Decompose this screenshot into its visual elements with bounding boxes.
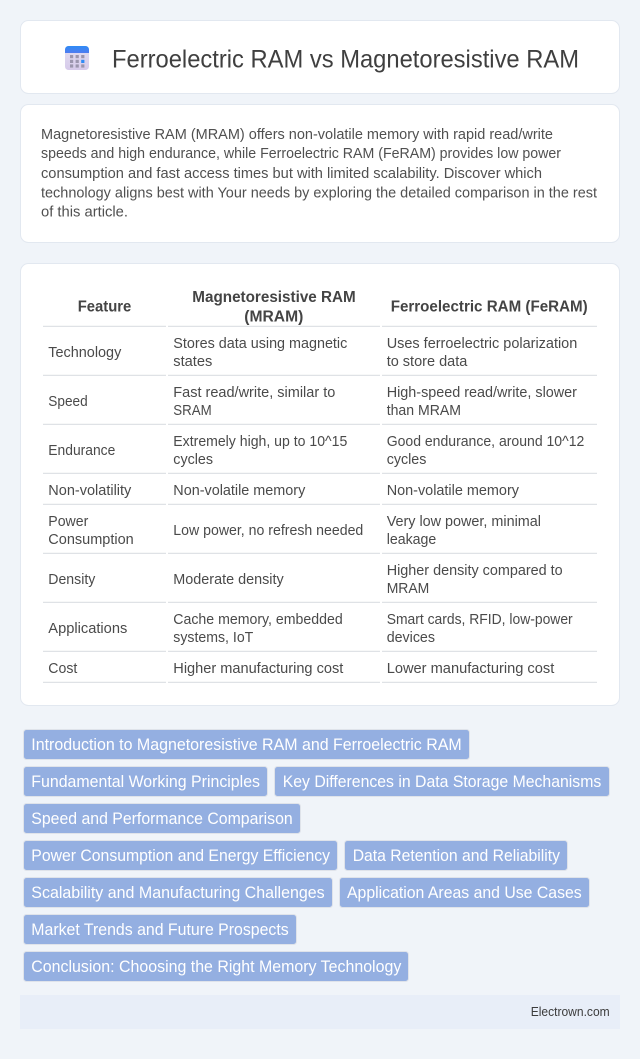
footer xyxy=(20,995,620,1029)
table header row: Feature xyxy=(78,299,131,316)
tag: application areas xyxy=(340,878,590,908)
row: endurance xyxy=(48,434,584,468)
tag: conclusion xyxy=(24,952,408,982)
row: cost: Cost xyxy=(48,661,77,677)
row: endurance: cycles xyxy=(173,452,213,468)
panel: comparison table xyxy=(20,264,620,706)
row: power consumption: Low power, no refresh needed xyxy=(173,523,363,539)
table header row: Magnetoresistive RAM xyxy=(192,289,356,306)
panel: topic tags xyxy=(24,730,610,982)
row: power consumption: Power xyxy=(48,514,88,530)
row: applications: systems, IoT xyxy=(173,630,253,646)
row: endurance: Good endurance, around 10^12 xyxy=(387,434,584,450)
tag: conclusion: Conclusion: Choosing the Right Memory Technology xyxy=(31,958,402,976)
row: technology: Technology xyxy=(48,345,122,361)
row: speed: than MRAM xyxy=(387,403,461,419)
row: power consumption: Very low power, minimal xyxy=(387,514,541,530)
panel: introduction paragraph: of this article. xyxy=(41,205,128,221)
tag: scalability: Scalability and Manufacturing Challenges xyxy=(31,884,325,902)
row: density: Higher density compared to xyxy=(387,563,563,579)
row: applications: Applications xyxy=(48,621,127,637)
tag: market trends xyxy=(24,914,296,944)
panel: title header xyxy=(20,20,620,94)
panel: introduction paragraph: consumption and fast access times but with limited scalability. Discover which xyxy=(41,166,542,182)
tag: power consumption: Power Consumption and Energy Efficiency xyxy=(31,847,331,865)
tag: speed and performance: Speed and Performance Comparison xyxy=(31,810,293,828)
row: speed: Speed xyxy=(48,394,88,410)
row: non-volatility: Non-volatility xyxy=(48,483,132,499)
row: technology: Stores data using magnetic xyxy=(173,336,347,352)
tag: application areas: Application Areas and Use Cases xyxy=(347,884,582,902)
panel: introduction paragraph: speeds and high endurance, while Ferroelectric RAM (FeRAM) provides low power xyxy=(41,146,561,162)
row: power consumption: leakage xyxy=(387,532,436,548)
row: cost: Higher manufacturing cost xyxy=(173,661,343,677)
tag: introduction: Introduction to Magnetoresistive RAM and Ferroelectric RAM xyxy=(31,736,462,754)
tag: introduction xyxy=(24,730,470,760)
row: density: MRAM xyxy=(387,581,429,597)
row: cost xyxy=(48,661,554,677)
icon: memory chip calendar xyxy=(65,46,89,70)
table header row: Ferroelectric RAM (FeRAM) xyxy=(391,299,588,316)
row: applications xyxy=(48,612,573,646)
tag: working principles xyxy=(24,766,268,796)
row: applications: devices xyxy=(387,630,435,646)
tag: scalability xyxy=(24,878,332,908)
title: Ferroelectric RAM vs Magnetoresistive RAM xyxy=(112,45,579,73)
row: technology xyxy=(48,336,577,370)
row: cost: Lower manufacturing cost xyxy=(387,661,554,677)
row: density: Moderate density xyxy=(173,572,284,588)
tag: data retention: Data Retention and Reliability xyxy=(353,847,561,865)
row: power consumption xyxy=(48,514,541,548)
row: speed: SRAM xyxy=(173,403,212,419)
tag: data retention xyxy=(344,840,568,870)
panel: introduction paragraph: Magnetoresistive RAM (MRAM) offers non-volatile memory with rapid read/write xyxy=(41,127,553,143)
row: endurance: Endurance xyxy=(48,443,115,459)
row: density xyxy=(48,563,563,597)
tag: key differences: Key Differences in Data Storage Mechanisms xyxy=(283,773,601,791)
table header row: (MRAM) xyxy=(244,308,303,325)
tag: speed and performance xyxy=(24,804,300,834)
tag: power consumption xyxy=(24,840,338,870)
row: technology: to store data xyxy=(387,354,468,370)
panel: introduction paragraph xyxy=(20,104,620,242)
tag: working principles: Fundamental Working Principles xyxy=(31,773,260,791)
row: endurance: cycles xyxy=(387,452,426,468)
panel: introduction paragraph: technology aligns best with Your needs by exploring the detailed comparison in the rest xyxy=(41,185,597,201)
row: technology: Uses ferroelectric polarization xyxy=(387,336,577,352)
row: density: Density xyxy=(48,572,96,588)
table header row xyxy=(78,289,588,325)
row: applications: Cache memory, embedded xyxy=(173,612,343,628)
row: speed: High-speed read/write, slower xyxy=(387,385,577,401)
row: applications: Smart cards, RFID, low-power xyxy=(387,612,573,628)
row: technology: states xyxy=(173,354,212,370)
tag: market trends: Market Trends and Future Prospects xyxy=(31,921,289,939)
tag: key differences xyxy=(274,766,610,796)
row: non-volatility: Non-volatile memory xyxy=(173,483,306,499)
row: speed xyxy=(48,385,577,419)
footer: Electrown.com xyxy=(531,1005,610,1019)
row: speed: Fast read/write, similar to xyxy=(173,385,335,401)
row: power consumption: Consumption xyxy=(48,532,134,548)
row: non-volatility xyxy=(48,483,520,499)
row: non-volatility: Non-volatile memory xyxy=(387,483,520,499)
row: endurance: Extremely high, up to 10^15 xyxy=(173,434,347,450)
